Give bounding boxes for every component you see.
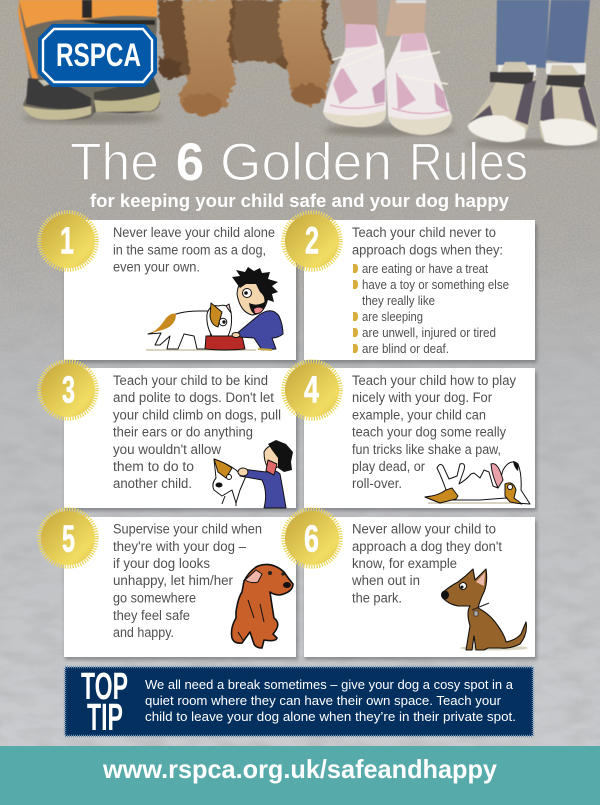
title: The (70, 133, 159, 192)
badge: number 4: 4 (304, 370, 319, 412)
badge: number 1 (40, 212, 96, 270)
footer band with website (0, 746, 600, 805)
rule 4 text: example, your child can (352, 408, 486, 422)
logo: RSPCA (38, 24, 157, 87)
photo: grey shoes child (467, 0, 600, 149)
badge: number 2 (284, 212, 340, 270)
rule 1 text: Never leave your child alone (113, 225, 275, 240)
panel: rule 5 (64, 517, 296, 657)
badge: number 2: 2 (305, 220, 319, 262)
rule 6 text: Never allow your child to (352, 522, 496, 536)
rule 2 bullet list: are blind or deaf. (362, 342, 449, 356)
rule 2 intro text: approach dogs when they: (352, 242, 503, 258)
badge: number 1: 1 (60, 220, 74, 262)
rule 5 text: go somewhere (113, 590, 196, 606)
rule 5 text: Supervise your child when (113, 522, 262, 536)
rule 2 bullet list: are unwell, injured or tired (362, 326, 496, 340)
illustration: brown dog in park (441, 569, 528, 650)
subtitle: for keeping your child safe and your dog happy (90, 191, 509, 211)
rule 3 text: another child. (113, 476, 192, 491)
panel: rule 3 (64, 368, 296, 508)
rule 1 text: in the same room as a dog, (113, 242, 266, 258)
rule 4 text: teach your dog some really (352, 424, 506, 440)
top tip heading (81, 666, 128, 739)
rule 2 intro text (352, 225, 503, 258)
badge: number 5 (40, 510, 96, 566)
rule 3 text (113, 373, 281, 491)
rule 2 bullet list: have a toy or something else (362, 278, 509, 292)
badge: number 5: 5 (62, 518, 75, 560)
top tip heading: TIP (87, 697, 123, 739)
illustration: dog rolling over (425, 461, 530, 504)
photo: orange boots child (18, 0, 162, 124)
rule 5 text: they feel safe (113, 608, 190, 623)
rule 3 text: Teach your child to be kind (113, 373, 268, 388)
photo: pink shoes child (323, 0, 456, 136)
rule 4 text: play dead, or (352, 459, 425, 474)
title: 6 (176, 133, 204, 192)
rule 6 text (351, 522, 502, 606)
rule 4 text (352, 373, 516, 491)
rule 2 bullet list: are eating or have a treat (362, 262, 488, 276)
badge: number 6: 6 (304, 518, 319, 560)
rule 4 text: fun tricks like shake a paw, (352, 442, 501, 457)
rule 1 text (113, 225, 275, 274)
photo: children's feet and dog (18, 0, 600, 149)
rule 2 bullet list: are sleeping (362, 310, 423, 324)
illustration: unhappy orange dog (232, 564, 293, 648)
rule 1 text: even your own. (113, 260, 200, 274)
rule 5 text: they're with your dog – (113, 539, 246, 554)
rule 6 text: the park. (352, 590, 402, 606)
rule 5 text (113, 522, 262, 640)
rule 5 text: if your dog looks (113, 556, 210, 571)
panel: rule 4 (304, 368, 535, 508)
illustration: child pulling dog's ear (213, 440, 293, 508)
panel: rule 6 (304, 517, 535, 657)
top tip text: quiet room where they can have their own space. Teach your (145, 693, 502, 708)
panel shadows (65, 224, 537, 660)
badge: number 6 (284, 510, 340, 566)
title: Rules (409, 133, 528, 192)
title (70, 133, 528, 192)
rule 3 text: their ears or do anything (113, 424, 253, 440)
rule 2 intro text: Teach your child never to (352, 225, 496, 240)
rule 2 bullet list: they really like (362, 294, 435, 308)
title: Golden (220, 133, 392, 192)
panel: rule 1 (64, 220, 296, 360)
footer band with website: www.rspca.org.uk/safeandhappy (102, 754, 498, 784)
badge: number 3: 3 (62, 370, 75, 412)
rule 6 text: when out in (351, 573, 420, 588)
panel: top tip (65, 666, 533, 739)
illustration: child watching dog eat from bowl (146, 267, 283, 350)
rule 3 text: and polite to dogs. Don't let (113, 390, 274, 405)
rule 3 text: them to do to (113, 459, 194, 474)
photo: dog legs (158, 0, 334, 117)
rule 3 text: your child climb on dogs, pull (113, 408, 281, 422)
rule 4 text: Teach your child how to play (352, 373, 516, 388)
logo: RSPCA: RSPCA (56, 37, 141, 73)
rule 6 text: know, for example (352, 556, 457, 571)
rule 6 text: approach a dog they don't (352, 539, 502, 554)
badge: number 4 (284, 362, 340, 418)
rule 5 text: unhappy, let him/her (113, 573, 233, 588)
rule 2 bullet list (353, 262, 509, 356)
top tip text: We all need a break sometimes – give your dog a cosy spot in a (145, 677, 514, 692)
top tip text: child to leave your dog alone when they’re in their private spot. (145, 709, 516, 724)
rule 5 text: and happy. (113, 625, 174, 640)
panel: rule 2 (304, 220, 535, 360)
rule 3 text: you wouldn't allow (113, 442, 221, 457)
rule 4 text: nicely with your dog. For (352, 390, 492, 405)
top tip text (145, 677, 516, 724)
rule 4 text: roll-over. (352, 476, 402, 491)
badge: number 3 (40, 362, 96, 418)
top tip heading: TOP (81, 666, 128, 708)
